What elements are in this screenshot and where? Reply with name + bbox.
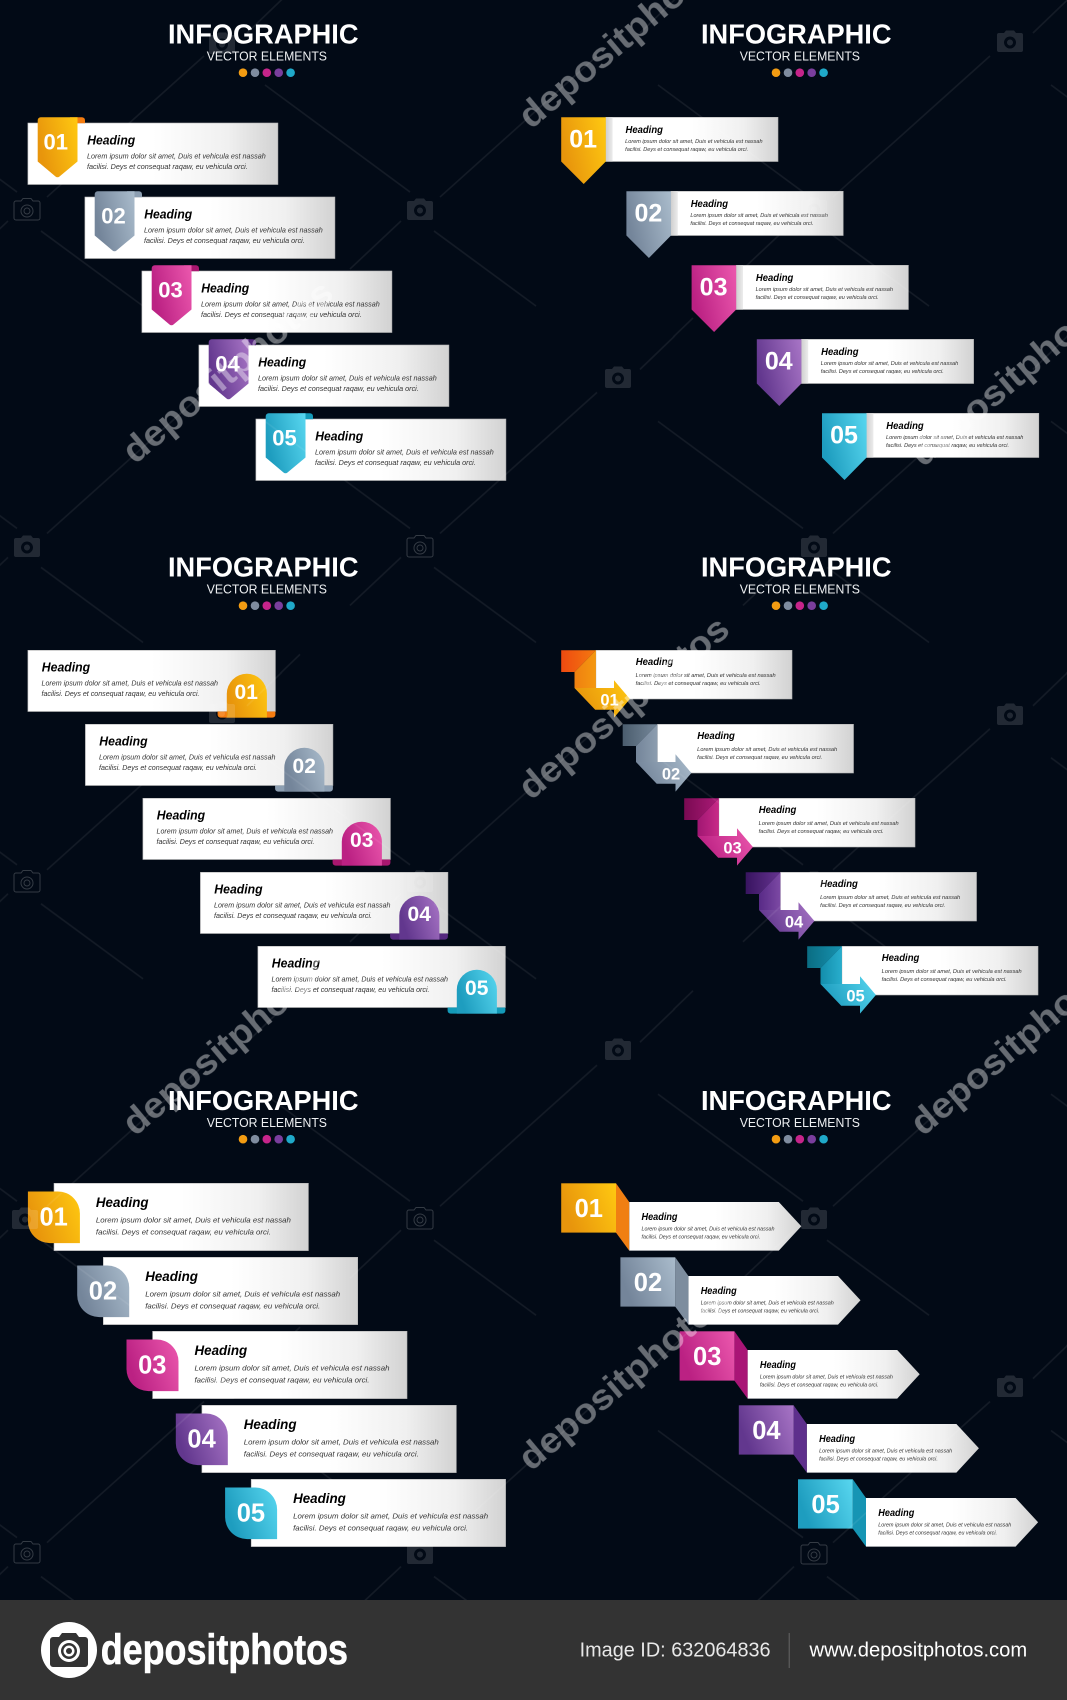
heading: Heading <box>882 953 919 964</box>
step 03 <box>142 265 392 332</box>
body text <box>760 1375 893 1388</box>
body text: Lorem ipsum dolor sit amet, Duis et vehicula est nassah <box>201 302 380 308</box>
step 05 <box>822 413 1039 480</box>
step 01 <box>28 650 275 718</box>
body text: facilisi. Deys et consequat raqaw, eu vehicula orci. <box>759 829 884 835</box>
step 02 <box>85 191 335 258</box>
heading: Heading <box>821 347 858 358</box>
step 03 <box>126 1331 407 1399</box>
body text <box>882 969 1022 983</box>
step 05 <box>225 1479 506 1547</box>
heading: Heading <box>214 882 263 897</box>
body text <box>293 1511 488 1532</box>
heading: Heading <box>194 1342 248 1358</box>
body text: Lorem ipsum dolor sit amet, Duis et vehicula est nassah <box>625 139 763 145</box>
body text <box>42 680 218 698</box>
step 03 <box>680 1331 920 1399</box>
body text <box>315 450 494 467</box>
number: 05 <box>811 1491 840 1519</box>
body text: Lorem ipsum dolor sit amet, Duis et vehicula est nassah <box>156 828 333 836</box>
title: INFOGRAPHIC <box>701 552 892 582</box>
body text: facilisi. Deys et consequat raqaw, eu vehicula orci. <box>96 1227 271 1236</box>
card <box>199 345 449 406</box>
card <box>54 1183 308 1251</box>
heading: Heading <box>691 199 728 210</box>
badge <box>38 117 85 177</box>
step 05 <box>807 946 1038 1014</box>
heading: Heading <box>293 1490 346 1506</box>
card <box>780 872 976 921</box>
card <box>143 798 390 860</box>
body text: facilisi. Deys et consequat raqaw, eu vehicula orci. <box>244 1449 419 1458</box>
subtitle: VECTOR ELEMENTS <box>740 1116 860 1130</box>
body text: facilisi. Deys et consequat raqaw, eu vehicula orci. <box>625 147 748 153</box>
body text: facilisi. Deys et consequat raqaw, eu vehicula orci. <box>636 681 761 687</box>
number: 04 <box>785 914 804 932</box>
badge <box>209 339 256 399</box>
number: 05 <box>272 425 297 450</box>
body text <box>636 673 776 687</box>
body text: Lorem ipsum dolor sit amet, Duis et vehicula est nassah <box>882 969 1022 975</box>
body text: facilisi. Deys et consequat raqaw, eu vehicula orci. <box>819 1456 938 1462</box>
number: 02 <box>89 1277 117 1305</box>
ribbon arrow <box>623 724 691 792</box>
ribbon arrow <box>684 798 753 866</box>
body text: facilisi. Deys et consequat raqaw, eu vehicula orci. <box>882 977 1007 983</box>
number: 04 <box>215 351 240 376</box>
body text: Lorem ipsum dolor sit amet, Duis et vehicula est nassah <box>315 450 494 456</box>
panel 5: leaf badge cards <box>28 1085 506 1547</box>
number: 02 <box>662 766 680 784</box>
colour dots <box>239 601 295 610</box>
watermark text <box>114 0 1067 1478</box>
number: 03 <box>723 840 742 858</box>
body text: facilisi. Deys et consequat raqaw, eu vehicula orci. <box>878 1530 997 1536</box>
step 04 <box>199 339 449 406</box>
step 03 <box>684 798 915 866</box>
body text <box>201 302 380 319</box>
badge <box>218 674 275 718</box>
body text: Lorem ipsum dolor sit amet, Duis et vehicula est nassah <box>272 976 448 984</box>
colour dots <box>772 1135 828 1144</box>
body text <box>878 1523 1011 1536</box>
heading: Heading <box>201 280 249 295</box>
heading: Heading <box>701 1286 737 1297</box>
watermark text: depositphotos <box>510 607 737 807</box>
step 05 <box>258 946 505 1014</box>
card <box>801 339 974 384</box>
body text <box>156 828 333 846</box>
body text: Lorem ipsum dolor sit amet, Duis et vehicula est nassah <box>293 1511 488 1520</box>
badge <box>757 339 801 406</box>
watermark text: depositphotos <box>114 943 341 1143</box>
panel 6: 3D tile with arrow cards <box>561 1085 1038 1547</box>
number: 03 <box>693 1343 721 1371</box>
body text: Lorem ipsum dolor sit amet, Duis et vehicula est nassah <box>96 1215 291 1224</box>
colour dots <box>772 601 828 610</box>
badge <box>126 1340 178 1391</box>
subtitle: VECTOR ELEMENTS <box>740 50 860 64</box>
title: INFOGRAPHIC <box>168 18 359 50</box>
badge <box>561 117 606 184</box>
heading: Heading <box>820 879 858 890</box>
panel 4: folded arrow ribbons <box>561 552 1038 1014</box>
card <box>202 1405 456 1473</box>
number: 01 <box>600 692 619 710</box>
number: 04 <box>187 1425 217 1453</box>
card <box>657 724 854 773</box>
badge <box>390 896 448 940</box>
number: 02 <box>634 200 662 228</box>
panel 3: dome badge cards <box>28 552 505 1014</box>
title: INFOGRAPHIC <box>168 1085 359 1116</box>
card <box>142 271 392 332</box>
ribbon arrow <box>746 872 814 940</box>
number: 01 <box>569 126 597 154</box>
body text: facilisi. Deys et consequat raqaw, eu vehicula orci. <box>201 312 362 319</box>
body text: facilisi. Deys et consequat raqaw, eu vehicula orci. <box>760 1382 879 1388</box>
step 03 <box>692 265 908 332</box>
card <box>28 650 275 712</box>
watermark text: depositphotos <box>510 1278 737 1478</box>
body text: Lorem ipsum dolor sit amet, Duis et vehicula est nassah <box>244 1437 439 1446</box>
body text: Lorem ipsum dolor sit amet, Duis et vehicula est nassah <box>820 895 960 901</box>
tile <box>620 1257 688 1325</box>
badge <box>176 1414 228 1465</box>
step 02 <box>85 724 333 792</box>
body text: Lorem ipsum dolor sit amet, Duis et vehicula est nassah <box>194 1363 390 1372</box>
website url: www.depositphotos.com <box>808 1640 1027 1662</box>
heading: Heading <box>626 125 663 136</box>
body text <box>625 139 763 153</box>
body text <box>690 213 828 227</box>
number: 01 <box>575 1195 603 1223</box>
body text <box>701 1301 834 1314</box>
body text: Lorem ipsum dolor sit amet, Duis et vehicula est nassah <box>886 435 1023 441</box>
step 04 <box>757 339 974 406</box>
body text: Lorem ipsum dolor sit amet, Duis et vehicula est nassah <box>636 673 776 679</box>
number: 04 <box>752 1417 781 1445</box>
body text: facilisi. Deys et consequat raqaw, eu vehicula orci. <box>145 1301 320 1310</box>
card <box>606 117 778 162</box>
heading: Heading <box>878 1508 914 1519</box>
heading: Heading <box>759 805 796 816</box>
heading: Heading <box>258 354 306 369</box>
body text: Lorem ipsum dolor sit amet, Duis et vehicula est nassah <box>701 1301 834 1307</box>
step 01 <box>561 1183 801 1251</box>
badge <box>152 265 199 325</box>
number: 01 <box>43 129 68 154</box>
number: 02 <box>293 755 316 778</box>
heading: Heading <box>636 657 673 668</box>
subtitle: VECTOR ELEMENTS <box>740 582 860 596</box>
heading: Heading <box>244 1416 297 1432</box>
arrow card <box>748 1350 920 1399</box>
body text <box>99 754 276 772</box>
badge <box>626 191 671 258</box>
number: 01 <box>235 681 258 704</box>
body text: facilisi. Deys et consequat raqaw, eu vehicula orci. <box>293 1523 468 1532</box>
badge <box>28 1192 80 1243</box>
title: INFOGRAPHIC <box>701 1085 892 1116</box>
heading: Heading <box>272 956 320 971</box>
subtitle: VECTOR ELEMENTS <box>207 582 327 596</box>
body text: Lorem ipsum dolor sit amet, Duis et vehicula est nassah <box>697 747 837 753</box>
arrow card <box>866 1498 1038 1547</box>
heading: Heading <box>760 1360 796 1371</box>
card <box>256 419 506 480</box>
card <box>251 1479 506 1547</box>
badge <box>822 413 867 480</box>
watermark text: depositphotos <box>114 271 341 471</box>
heading: Heading <box>642 1212 678 1223</box>
card <box>842 946 1038 995</box>
body text <box>759 821 899 835</box>
body text: facilisi. Deys et consequat raqaw, eu vehicula orci. <box>194 1375 370 1384</box>
subtitle: VECTOR ELEMENTS <box>207 50 327 64</box>
arrow card <box>688 1276 860 1325</box>
number: 05 <box>846 988 865 1006</box>
body text <box>214 902 391 920</box>
heading: Heading <box>145 1268 198 1284</box>
step 02 <box>623 724 854 792</box>
body text: facilisi. Deys et consequat raqaw, eu vehicula orci. <box>258 386 419 393</box>
body text: Lorem ipsum dolor sit amet, Duis et vehicula est nassah <box>258 376 437 382</box>
logo wordmark: depositphotos <box>101 1626 348 1674</box>
body text <box>145 1289 340 1310</box>
body text: facilisi. Deys et consequat raqaw, eu vehicula orci. <box>701 1308 819 1314</box>
body text: Lorem ipsum dolor sit amet, Duis et vehicula est nassah <box>214 902 391 910</box>
heading: Heading <box>99 734 148 749</box>
number: 03 <box>158 277 183 302</box>
number: 05 <box>237 1499 265 1527</box>
card <box>200 872 448 934</box>
number: 03 <box>700 274 728 302</box>
step 01 <box>28 1183 308 1251</box>
badge <box>275 748 333 792</box>
card <box>736 265 908 310</box>
badge <box>266 413 313 473</box>
step 01 <box>28 117 278 184</box>
card <box>258 946 505 1008</box>
number: 05 <box>465 977 489 1000</box>
body text <box>272 976 448 994</box>
body text: Lorem ipsum dolor sit amet, Duis et vehicula est nassah <box>756 287 893 293</box>
body text <box>756 287 893 301</box>
step 01 <box>561 117 778 184</box>
body text: Lorem ipsum dolor sit amet, Duis et vehicula est nassah <box>760 1375 893 1381</box>
title: INFOGRAPHIC <box>168 552 359 582</box>
number: 03 <box>350 829 373 852</box>
body text: facilisi. Deys et consequat raqaw, eu vehicula orci. <box>42 691 200 698</box>
arrow card <box>807 1424 979 1473</box>
body text: Lorem ipsum dolor sit amet, Duis et vehicula est nassah <box>878 1523 1011 1529</box>
ribbon arrow <box>561 650 630 718</box>
badge <box>333 822 390 866</box>
body text <box>96 1215 291 1236</box>
badge <box>448 970 505 1014</box>
heading: Heading <box>96 1194 149 1210</box>
body text: facilisi. Deys et consequat raqaw, eu vehicula orci. <box>820 903 945 909</box>
body text: Lorem ipsum dolor sit amet, Duis et vehicula est nassah <box>819 1449 952 1455</box>
card <box>85 724 333 786</box>
card <box>671 191 843 236</box>
panel 2: square tile with pointed base <box>561 18 1039 480</box>
body text: Lorem ipsum dolor sit amet, Duis et vehicula est nassah <box>87 154 266 160</box>
tile <box>739 1405 807 1473</box>
body text: Lorem ipsum dolor sit amet, Duis et vehicula est nassah <box>642 1227 774 1233</box>
body text: facilisi. Deys et consequat raqaw, eu vehicula orci. <box>99 765 257 772</box>
number: 02 <box>101 203 126 228</box>
body text <box>820 895 960 909</box>
number: 03 <box>138 1351 166 1379</box>
heading: Heading <box>87 132 135 147</box>
heading: Heading <box>144 206 192 221</box>
step 05 <box>798 1479 1038 1547</box>
body text: facilisi. Deys et consequat raqaw, eu vehicula orci. <box>642 1234 760 1240</box>
tile <box>680 1331 748 1399</box>
body text: facilisi. Deys et consequat raqaw, eu vehicula orci. <box>144 238 305 245</box>
heading: Heading <box>819 1434 855 1445</box>
body text <box>144 228 323 245</box>
badge <box>692 265 736 332</box>
number: 04 <box>408 903 431 926</box>
step 04 <box>739 1405 979 1473</box>
body text: facilisi. Deys et consequat raqaw, eu vehicula orci. <box>690 221 813 227</box>
body text: Lorem ipsum dolor sit amet, Duis et vehicula est nassah <box>144 228 323 234</box>
step 02 <box>626 191 843 258</box>
body text <box>258 376 437 393</box>
body text: facilisi. Deys et consequat raqaw, eu vehicula orci. <box>886 443 1009 449</box>
body text: Lorem ipsum dolor sit amet, Duis et vehicula est nassah <box>99 754 276 762</box>
step 04 <box>200 872 448 940</box>
body text: Lorem ipsum dolor sit amet, Duis et vehicula est nassah <box>821 361 958 367</box>
step 02 <box>620 1257 860 1325</box>
colour dots <box>239 1135 295 1144</box>
card <box>85 197 335 258</box>
body text: Lorem ipsum dolor sit amet, Duis et vehicula est nassah <box>42 680 218 688</box>
number: 01 <box>40 1203 68 1231</box>
title: INFOGRAPHIC <box>701 18 892 50</box>
arrow card <box>629 1202 801 1251</box>
body text: facilisi. Deys et consequat raqaw, eu vehicula orci. <box>756 295 879 301</box>
number: 05 <box>830 422 858 450</box>
heading: Heading <box>157 808 205 823</box>
tile <box>798 1479 866 1547</box>
heading: Heading <box>697 731 735 742</box>
heading: Heading <box>315 428 363 443</box>
body text: facilisi. Deys et consequat raqaw, eu vehicula orci. <box>821 369 944 375</box>
step 02 <box>77 1257 358 1325</box>
ribbon arrow <box>807 946 876 1014</box>
body text: facilisi. Deys et consequat raqaw, eu vehicula orci. <box>214 913 372 920</box>
body text: Lorem ipsum dolor sit amet, Duis et vehicula est nassah <box>690 213 828 219</box>
panel 1: shield tab cards <box>28 18 506 480</box>
footer bar <box>0 1600 1067 1700</box>
step 01 <box>561 650 792 718</box>
step 04 <box>176 1405 456 1473</box>
tile <box>561 1183 629 1251</box>
body text: Lorem ipsum dolor sit amet, Duis et vehicula est nassah <box>759 821 899 827</box>
body text: facilisi. Deys et consequat raqaw, eu vehicula orci. <box>272 987 430 994</box>
badge <box>225 1488 277 1539</box>
card <box>153 1331 407 1399</box>
card <box>719 798 915 847</box>
body text: facilisi. Deys et consequat raqaw, eu vehicula orci. <box>87 164 248 171</box>
step 04 <box>746 872 976 940</box>
heading: Heading <box>756 273 793 284</box>
number: 04 <box>765 348 793 376</box>
body text <box>244 1437 439 1458</box>
body text <box>886 435 1023 449</box>
colour dots <box>239 68 295 77</box>
heading: Heading <box>886 421 924 432</box>
body text: facilisi. Deys et consequat raqaw, eu vehicula orci. <box>315 460 476 467</box>
card <box>103 1257 358 1325</box>
body text <box>697 747 837 761</box>
body text <box>642 1227 774 1240</box>
number: 02 <box>634 1269 662 1297</box>
card <box>596 650 792 699</box>
step 05 <box>256 413 506 480</box>
body text <box>194 1363 390 1384</box>
body text <box>821 361 958 375</box>
body text <box>819 1449 952 1462</box>
body text: facilisi. Deys et consequat raqaw, eu vehicula orci. <box>156 839 315 846</box>
card <box>28 123 278 184</box>
badge <box>77 1266 129 1317</box>
body text <box>87 154 266 171</box>
body text: Lorem ipsum dolor sit amet, Duis et vehicula est nassah <box>145 1289 340 1298</box>
badge <box>95 191 142 251</box>
image id: Image ID: 632064836 <box>580 1640 771 1662</box>
colour dots <box>772 68 828 77</box>
subtitle: VECTOR ELEMENTS <box>207 1116 327 1130</box>
logo icon: camera <box>41 1622 97 1678</box>
heading: Heading <box>42 660 90 675</box>
card <box>867 413 1039 458</box>
step 03 <box>143 798 390 866</box>
body text: facilisi. Deys et consequat raqaw, eu vehicula orci. <box>697 755 822 761</box>
